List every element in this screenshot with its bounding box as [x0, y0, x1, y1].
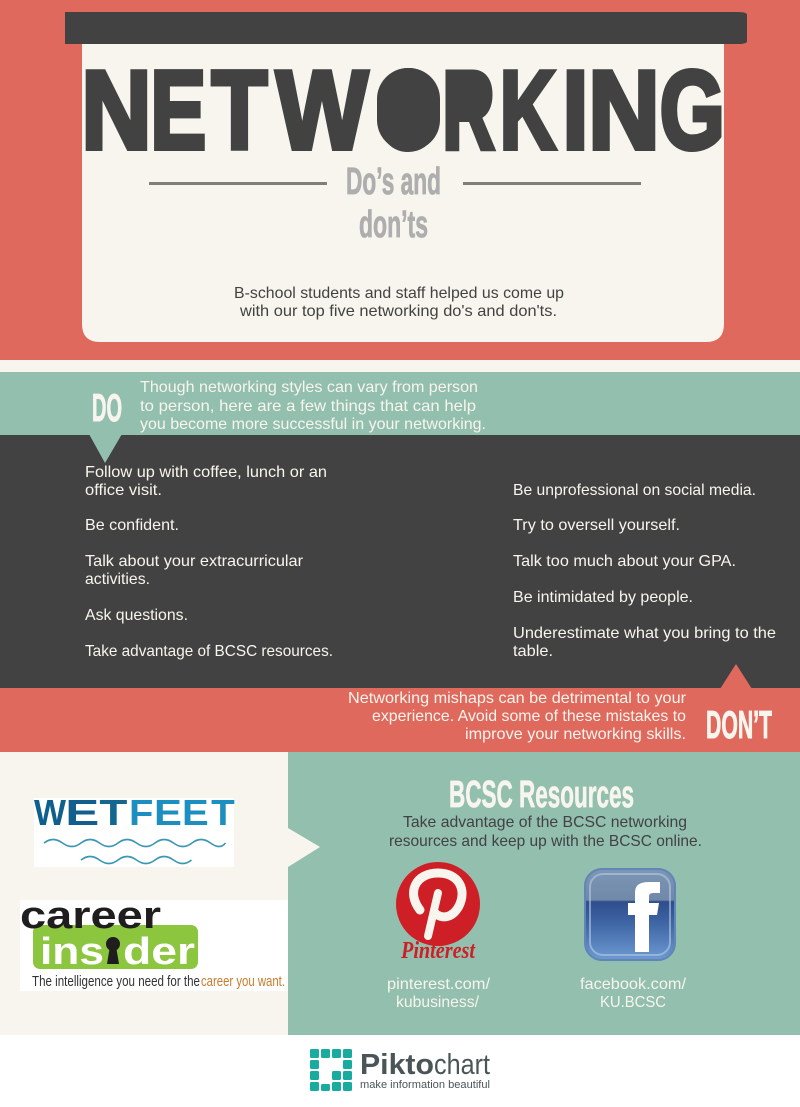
don't list: table.: [513, 643, 553, 660]
do list: office visit.: [85, 482, 162, 499]
subtitle: [346, 161, 441, 246]
title: E: [150, 48, 206, 172]
don't list: Try to oversell yourself.: [513, 517, 680, 534]
icon: facebook: [585, 869, 675, 960]
don't intro text: experience. Avoid some of these mistakes to: [372, 708, 686, 725]
footer: piktochart logo: [310, 1049, 490, 1091]
do list: Be confident.: [85, 517, 179, 534]
do list: Ask questions.: [85, 607, 188, 624]
logo: wetfeet: [34, 792, 235, 867]
logo: wetfeet: T: [211, 792, 235, 833]
header card: [82, 40, 724, 342]
do label: DO: [92, 387, 122, 430]
title: O: [376, 48, 441, 172]
panel: don't banner: [0, 664, 800, 752]
logo: career insider: The intelligence you need for the: [32, 974, 200, 990]
title: [81, 48, 725, 172]
panel: partner logos: [0, 752, 288, 1035]
intro text: B-school students and staff helped us come up: [234, 285, 564, 302]
do intro text: to person, here are a few things that can help: [140, 398, 476, 415]
logo: wetfeet: T: [99, 792, 127, 833]
do intro text: Though networking styles can vary from person: [140, 379, 478, 396]
don't intro text: improve your networking skills.: [465, 726, 686, 743]
footer: piktochart logo: chart: [434, 1049, 490, 1081]
don't intro text: [348, 690, 687, 743]
don't intro text: Networking mishaps can be detrimental to your: [348, 690, 687, 707]
do intro text: you become more successful in your networking.: [140, 416, 486, 433]
subtitle: Do’s and: [346, 161, 441, 203]
logo: wetfeet: F: [129, 792, 153, 833]
resources description: resources and keep up with the BCSC online.: [389, 833, 702, 850]
title: R: [442, 48, 495, 172]
do list: Talk about your extracurricular: [85, 553, 304, 570]
title: I: [562, 48, 588, 172]
pinterest link: pinterest.com/: [387, 976, 491, 993]
title: G: [660, 48, 725, 172]
footer: piktochart logo: make information beautiful: [360, 1079, 490, 1091]
facebook link: [580, 976, 687, 1011]
subtitle: don’ts: [359, 204, 428, 246]
don't list: Be intimidated by people.: [513, 589, 693, 606]
title: N: [588, 48, 660, 172]
logo: wetfeet: E: [182, 792, 209, 833]
don't list: Be unprofessional on social media.: [513, 482, 756, 499]
icon: pinterest: Pinterest: [400, 938, 476, 964]
header dark bar: [65, 12, 747, 44]
pinterest link: kubusiness/: [396, 994, 480, 1011]
do list: [85, 464, 333, 660]
logo: career insider: career you want.: [201, 974, 285, 990]
intro text: with our top five networking do's and don'ts.: [239, 303, 557, 320]
resources heading: BCSC Resources: [449, 774, 634, 816]
logo: wetfeet: E: [154, 792, 182, 833]
do pointer: [89, 434, 122, 463]
panel: lists: [0, 435, 800, 688]
resources description: [389, 814, 702, 850]
intro text: [234, 285, 564, 320]
title: T: [212, 48, 267, 172]
don't pointer: [720, 664, 752, 689]
title: N: [81, 48, 152, 172]
title: W: [276, 48, 368, 172]
logo: career insider: [20, 895, 288, 991]
do list: Follow up with coffee, lunch or an: [85, 464, 327, 481]
logo: wetfeet: W: [34, 792, 66, 833]
logo: career insider: career: [20, 895, 161, 937]
panel: bcsc resources: [288, 752, 800, 1035]
do intro text: [140, 379, 486, 433]
footer: piktochart logo: Pikto: [360, 1049, 434, 1081]
logo: career insider: der: [123, 931, 195, 973]
pinterest link: [387, 976, 491, 1011]
don't list: Talk too much about your GPA.: [513, 553, 736, 570]
resources pointer: [288, 828, 320, 867]
title: K: [500, 48, 556, 172]
do list: activities.: [85, 571, 150, 588]
logo: career insider: ins: [40, 931, 104, 973]
logo: wetfeet: E: [65, 792, 99, 833]
panel: header: [0, 0, 800, 360]
facebook link: KU.BCSC: [600, 994, 666, 1011]
icon: pinterest: [396, 862, 480, 964]
don't list: [513, 482, 776, 660]
do list: Take advantage of BCSC resources.: [85, 643, 333, 660]
resources description: Take advantage of the BCSC networking: [403, 814, 687, 831]
facebook link: facebook.com/: [580, 976, 687, 993]
don't list: Underestimate what you bring to the: [513, 625, 776, 642]
icon: piktochart mark: [310, 1049, 352, 1091]
panel: do banner: [0, 372, 800, 435]
